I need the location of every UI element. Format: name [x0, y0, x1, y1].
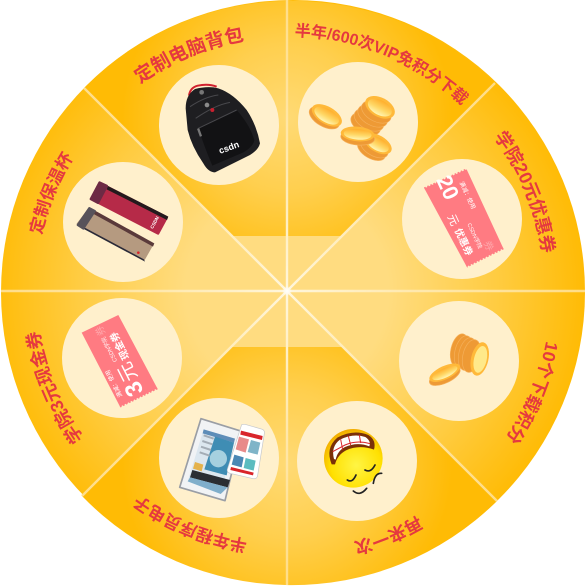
try again circle [297, 401, 417, 521]
coupon value: 20 [431, 171, 464, 204]
icon: tablet and phone [180, 419, 264, 501]
prize: laptop backpack [133, 27, 279, 185]
label: 20 yuan coupon: 学院20元优惠券 [496, 130, 556, 252]
icon: 3 yuan voucher: 元 [115, 358, 142, 385]
prize: 10 download credits [399, 301, 558, 444]
backpack circle [159, 65, 279, 185]
prize: half-year programmer e-magazine [133, 398, 279, 554]
backpack logo: csdn [217, 139, 241, 156]
icon: upside-down smiley [324, 429, 383, 493]
prize: 20 yuan coupon [402, 130, 556, 279]
bottom wedges [82, 347, 497, 585]
icon: coin stacks [306, 91, 399, 166]
magazine circle [159, 398, 279, 518]
icon: 20 yuan coupon: 元 [445, 213, 460, 228]
label: try again: 再来一次 [354, 516, 424, 554]
credits circle [298, 62, 418, 182]
label: 10 download credits: 10个下载积分 [507, 342, 558, 444]
icon: 20 yuan coupon [424, 169, 503, 267]
icon: two insulated cups: CSDN [149, 215, 160, 230]
voucher value: 3 [119, 377, 149, 401]
coupon circle [402, 159, 522, 279]
voucher circle [62, 298, 182, 418]
prize: VIP download credits [295, 22, 469, 182]
top wedges [84, 1, 495, 236]
prize: try again [297, 401, 424, 554]
icon: 20 yuan coupon: CSDN学院 [465, 222, 484, 250]
label: laptop backpack: 定制电脑背包 [133, 27, 244, 84]
icon: 20 yuan coupon: 满减：使用 [458, 180, 477, 210]
label: insulated cup: 定制保温杯 [29, 150, 73, 234]
icon: 3 yuan voucher: 券 [92, 324, 108, 338]
cup circle [63, 162, 183, 282]
icon: 3 yuan voucher [82, 315, 157, 407]
label: VIP download credits: 半年/600次VIP免积分下载 [295, 22, 469, 106]
prize: insulated cup [29, 150, 183, 282]
icon: 20 yuan coupon: 优惠券 [452, 226, 475, 258]
icon: 20 yuan coupon: 券 [481, 239, 497, 253]
prize: 3 yuan cash voucher [25, 298, 182, 444]
icon: backpack [186, 85, 260, 172]
icon: two insulated cups [78, 183, 168, 262]
credits circle [399, 301, 519, 421]
icon: 3 yuan voucher: CSDN学院 [99, 335, 119, 364]
icon: 3 yuan voucher: 满减：使用 [104, 368, 124, 399]
icon: 3 yuan voucher: 现金券 [107, 330, 132, 362]
icon: coin roll [426, 332, 493, 389]
label: half-year programmer e-magazine: 半年程序员电子 [133, 498, 246, 554]
label: 3 yuan cash voucher: 学院3元现金券 [25, 332, 82, 444]
